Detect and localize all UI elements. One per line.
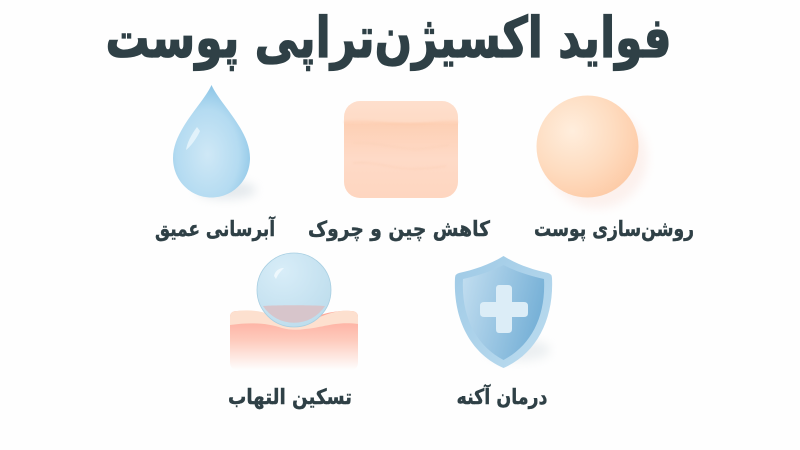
icon: bubble on inflamed skin <box>230 253 358 370</box>
label: soothing inflammation: تسکین التهاب <box>228 385 352 409</box>
icon: water drop <box>173 85 256 199</box>
label: acne treatment: درمان آکنه <box>456 384 548 409</box>
icon: shield with plus <box>455 256 552 368</box>
icon: glowing sphere <box>536 96 647 208</box>
label: wrinkle reduction: کاهش چین و چروک <box>308 217 491 241</box>
label: skin brightening: روشن‌سازی پوست <box>534 217 694 241</box>
label: deep hydration: آبرسانی عمیق <box>155 216 276 241</box>
icon: skin with wrinkles <box>344 101 458 198</box>
